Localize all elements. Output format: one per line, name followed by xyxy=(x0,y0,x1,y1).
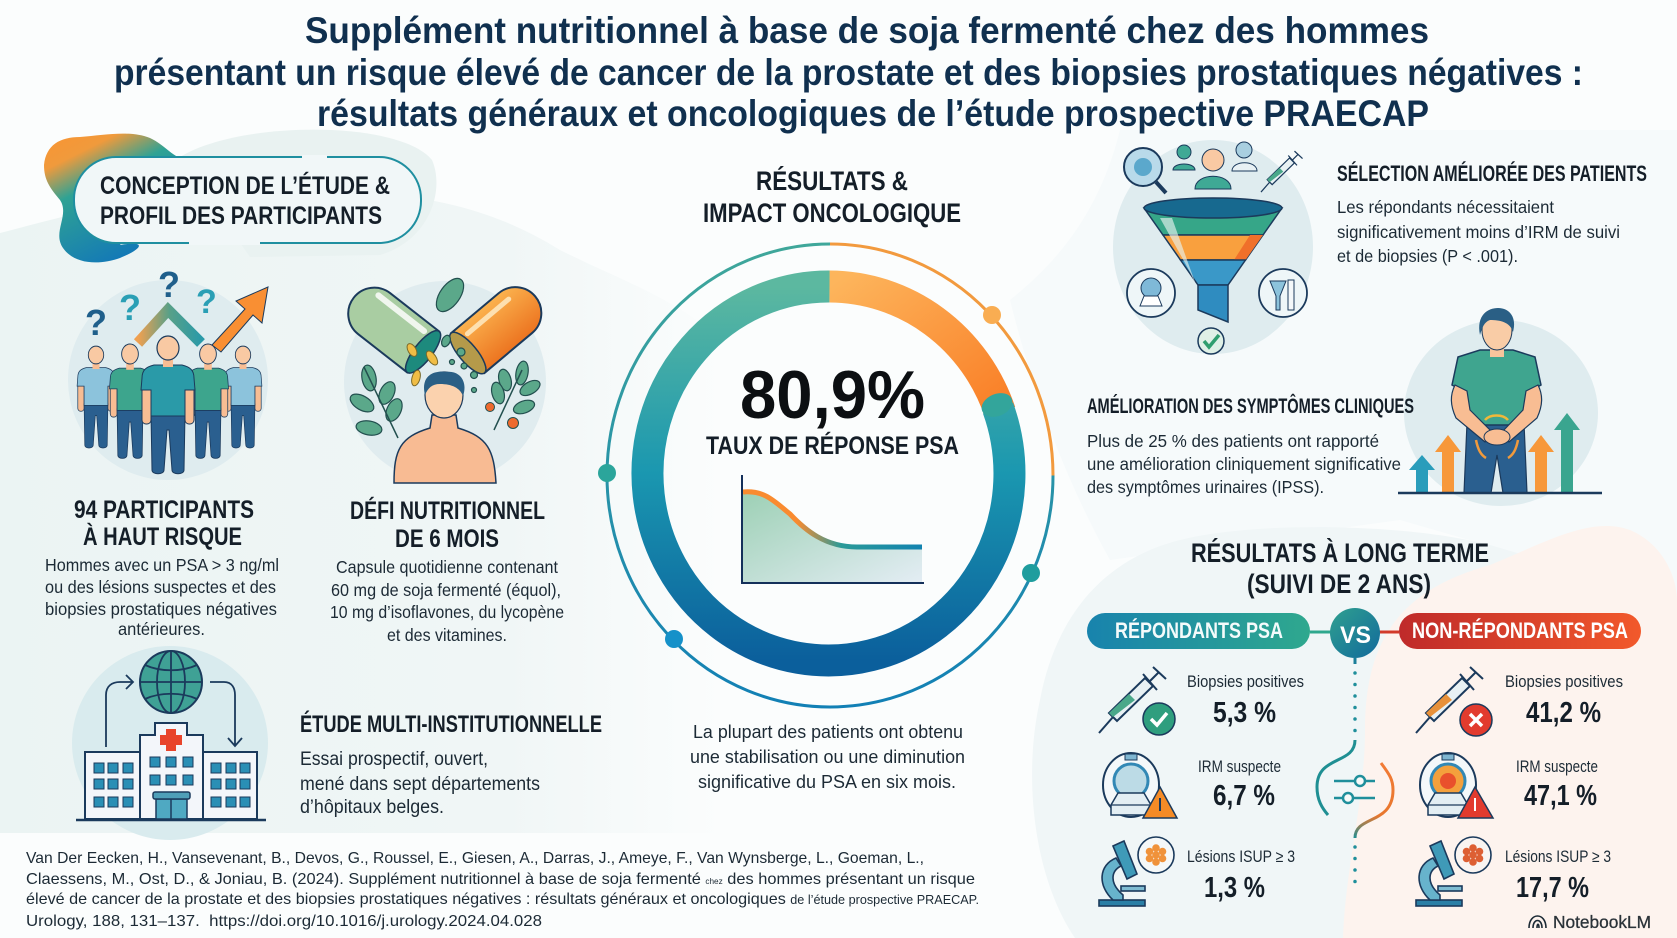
logo: NotebookLM: NotebookLM xyxy=(1553,912,1651,932)
citation: Claessens, M., Ost, D., & Joniau, B. (2024). Supplément nutritionnel à base de soja fermenté chez des hommes présentant un risque xyxy=(26,871,975,888)
text block: nutritional challenge: Capsule quotidienne contenant xyxy=(336,557,558,577)
text block: nutritional challenge: DÉFI NUTRITIONNEL xyxy=(350,496,545,525)
icon: high-risk participants xyxy=(68,264,268,480)
metric: positive biopsies: 41,2 % xyxy=(1526,697,1601,729)
text block: improved patient selection: significativement moins d’IRM de suivi xyxy=(1337,222,1620,242)
text block: improved patient selection: et de biopsies (P < .001). xyxy=(1337,246,1518,266)
metric: ISUP lesions xyxy=(1505,848,1611,904)
metric: suspicious MRI: 47,1 % xyxy=(1524,780,1597,812)
text block: clinical symptoms improvement: Plus de 25 % des patients ont rapporté xyxy=(1087,431,1379,451)
text block: 94 participants: biopsies prostatiques négatives xyxy=(45,599,277,619)
heading: study design: PROFIL DES PARTICIPANTS xyxy=(100,202,382,230)
text block: nutritional challenge: DE 6 MOIS xyxy=(395,525,499,553)
metric: suspicious MRI xyxy=(1516,758,1598,812)
icon: nutritional capsule and man xyxy=(338,274,552,483)
text block: clinical symptoms improvement: des symptômes urinaires (IPSS). xyxy=(1087,477,1324,497)
text block: 94 participants: À HAUT RISQUE xyxy=(83,522,242,551)
icon: high-risk participants: ? xyxy=(196,283,217,321)
metric: ISUP lesions: Lésions ISUP ≥ 3 xyxy=(1187,848,1295,866)
text block: clinical symptoms improvement xyxy=(1087,394,1414,497)
citation xyxy=(26,850,979,930)
heading: results and oncological impact: IMPACT ONCOLOGIQUE xyxy=(703,198,961,228)
citation: élevé de cancer de la prostate et des biopsies prostatiques négatives : résultats généraux et oncologiques de l’étude prospective PRAECAP. xyxy=(26,891,979,908)
heading: results and oncological impact: RÉSULTATS & xyxy=(756,165,908,196)
metric: positive biopsies: 5,3 % xyxy=(1213,697,1276,729)
pill: PSA non-responders xyxy=(1399,613,1641,649)
text block: improved patient selection: Les répondants nécessitaient xyxy=(1337,197,1554,217)
heading: study design: CONCEPTION DE L’ÉTUDE & xyxy=(100,171,390,200)
donut ring xyxy=(647,286,1016,660)
pill: PSA responders xyxy=(1087,613,1310,649)
label: TAUX DE RÉPONSE PSA xyxy=(706,431,959,460)
metric: positive biopsies xyxy=(1505,673,1623,729)
heading: long-term results xyxy=(1191,537,1489,599)
metric: ISUP lesions: 1,3 % xyxy=(1204,872,1265,904)
outer thin ring xyxy=(598,244,1053,707)
heading: results and oncological impact xyxy=(703,165,961,228)
title: Supplément nutritionnel à base de soja fermenté chez des hommes xyxy=(305,10,1429,51)
icon: high-risk participants: ? xyxy=(119,287,141,328)
text block: multi-institutional study xyxy=(300,710,602,818)
heading: study design xyxy=(100,171,390,230)
icon: hospital and globe xyxy=(72,646,268,840)
caption: PSA stabilisation: une stabilisation ou une diminution xyxy=(690,747,965,767)
icon: syringe with cross xyxy=(1416,667,1492,736)
citation: Van Der Eecken, H., Vansevenant, B., Devos, G., Roussel, E., Giesen, A., Darras, J., Ameye, F., Van Wynsberge, L., Goeman, L., xyxy=(26,850,924,867)
comparison header: responders vs non-responders xyxy=(1087,608,1641,658)
citation: Urology, 188, 131–137. https://doi.org/10.1016/j.urology.2024.04.028 xyxy=(26,913,542,930)
VS badge xyxy=(1330,608,1380,658)
text block: clinical symptoms improvement: une amélioration cliniquement significative xyxy=(1087,454,1401,474)
metric: suspicious MRI: IRM suspecte xyxy=(1516,758,1598,776)
icon: MRI with warning xyxy=(1103,753,1177,818)
text block: improved patient selection xyxy=(1337,161,1647,266)
pill: PSA non-responders: NON-RÉPONDANTS PSA xyxy=(1412,618,1628,643)
title xyxy=(114,10,1583,134)
heading: long-term results: RÉSULTATS À LONG TERME xyxy=(1191,537,1489,568)
metric: positive biopsies xyxy=(1187,673,1304,729)
icon: man with urinary symptoms and rising arrows xyxy=(1398,308,1602,506)
text block: nutritional challenge: 10 mg d’isoflavones, du lycopène xyxy=(330,602,564,622)
metric: ISUP lesions xyxy=(1187,848,1295,904)
metric: positive biopsies: Biopsies positives xyxy=(1187,673,1304,691)
text block: 94 participants xyxy=(45,496,279,639)
caption: PSA stabilisation: significative du PSA en six mois. xyxy=(698,772,956,792)
text block: 94 participants: antérieures. xyxy=(118,619,205,639)
text block: multi-institutional study: Essai prospectif, ouvert, xyxy=(300,749,488,770)
metric: ISUP lesions: 17,7 % xyxy=(1516,872,1589,904)
metric: suspicious MRI xyxy=(1198,758,1281,812)
text block: nutritional challenge: 60 mg de soja fermenté (équol), xyxy=(331,580,561,600)
panel: responders results xyxy=(1099,667,1304,906)
PSA decline curve xyxy=(742,475,924,583)
text block: nutritional challenge xyxy=(330,496,564,645)
caption: PSA stabilisation xyxy=(690,722,965,792)
title: résultats généraux et oncologiques de l’étude prospective PRAECAP xyxy=(317,93,1429,134)
caption: PSA stabilisation: La plupart des patients ont obtenu xyxy=(693,722,963,742)
icon: patient selection funnel xyxy=(1113,140,1313,354)
text block: clinical symptoms improvement: AMÉLIORATION DES SYMPTÔMES CLINIQUES xyxy=(1087,394,1414,418)
text block: multi-institutional study: ÉTUDE MULTI-INSTITUTIONNELLE xyxy=(300,710,602,738)
metric: ISUP lesions: Lésions ISUP ≥ 3 xyxy=(1505,848,1611,866)
icon: syringe with check xyxy=(1099,667,1175,735)
pill: PSA responders: RÉPONDANTS PSA xyxy=(1115,618,1283,643)
value: 80,9% xyxy=(740,357,925,433)
metric: positive biopsies: Biopsies positives xyxy=(1505,673,1623,691)
chart: 80.9% PSA response ring xyxy=(598,244,1053,707)
text block: nutritional challenge: et des vitamines. xyxy=(387,625,507,645)
icon: MRI with red warning xyxy=(1420,753,1493,818)
text block: multi-institutional study: d’hôpitaux belges. xyxy=(300,797,444,818)
icon: microscope with cells xyxy=(1416,837,1491,906)
metric: suspicious MRI: 6,7 % xyxy=(1213,780,1275,812)
divider: dotted line and sliders xyxy=(1317,658,1393,892)
heading: long-term results: (SUIVI DE 2 ANS) xyxy=(1247,569,1431,599)
icon: microscope with cells xyxy=(1099,837,1174,906)
icon: high-risk participants: ? xyxy=(85,302,107,343)
text block: 94 participants: ou des lésions suspectes et des xyxy=(45,577,276,597)
panel: non-responders results xyxy=(1416,667,1623,906)
icon: high-risk participants: ? xyxy=(158,264,180,305)
panel: study design header xyxy=(44,130,436,262)
text block: 94 participants: 94 PARTICIPANTS xyxy=(74,496,254,524)
metric: suspicious MRI: IRM suspecte xyxy=(1198,758,1281,776)
text block: 94 participants: Hommes avec un PSA > 3 ng/ml xyxy=(45,555,279,575)
VS badge: VS xyxy=(1340,622,1371,649)
text block: multi-institutional study: mené dans sept départements xyxy=(300,774,540,795)
